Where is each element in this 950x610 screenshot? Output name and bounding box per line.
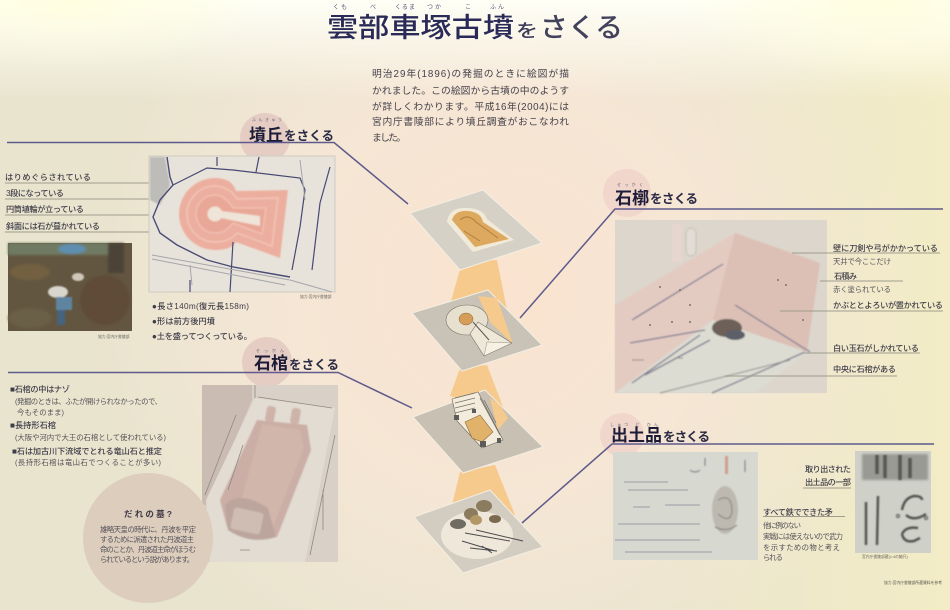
title: さくる — [540, 13, 623, 43]
facts: mound: ●土を盛ってつくっている。 — [152, 331, 252, 341]
title: つか — [427, 4, 441, 11]
facts: stone coffin: (長持形石棺は竜山石でつくることが多い) — [15, 458, 161, 467]
callout circle: whose tomb: 雄略天皇の時代に、丹波を平定 — [100, 525, 197, 534]
facts: stone coffin — [10, 384, 166, 467]
heading: stone chamber: せっかく — [617, 181, 643, 187]
drawing of excavated objects — [613, 452, 758, 560]
callout circle: whose tomb: するために派遣された丹波道主 — [100, 535, 194, 544]
text: iron spears — [763, 507, 845, 562]
footer credit: 協力:宮内庁書陵部所蔵資料を参考 — [884, 580, 942, 585]
heading: excavated objects: をさくる — [663, 430, 710, 444]
callout circle: whose tomb: だれの墓? — [124, 509, 172, 519]
heading: excavated objects — [600, 413, 710, 457]
callout labels: stone chamber: 白い玉石がしかれている — [833, 343, 919, 353]
layer: artefacts — [414, 490, 543, 573]
heading: mound: 墳丘 — [249, 125, 283, 145]
heading: stone coffin: をさくる — [289, 358, 339, 372]
facts: stone coffin: ■石は加古川下流域でとれる竜山石と推定 — [12, 446, 162, 456]
layer: sarcophagus chamber — [413, 390, 543, 473]
drawing of stone chamber — [615, 220, 827, 393]
heading: stone chamber — [603, 169, 698, 217]
title: こ — [465, 4, 471, 11]
layer: mound — [410, 190, 542, 270]
text: iron spears: 他に例のない — [763, 521, 801, 530]
beams — [448, 260, 515, 515]
photo credit: 協力:宮内庁書陵部 — [98, 334, 130, 339]
heading: mound: ふんきゅう — [252, 116, 282, 122]
callout labels: stone chamber — [725, 243, 943, 376]
callout labels: mound — [5, 173, 200, 232]
intro text block: ました。 — [372, 132, 406, 144]
text: iron spears: を示すための物と考え — [763, 543, 840, 552]
leader line to mound layer — [7, 142, 408, 204]
callout circle: whose tomb: られているという説があります。 — [100, 555, 194, 564]
leader line to chamber layer — [520, 209, 943, 318]
heading: stone chamber: をさくる — [650, 192, 698, 206]
leader line to coffin layer — [8, 372, 412, 408]
heading: mound: をさくる — [284, 129, 334, 143]
callout labels: stone chamber: 中央に石棺がある — [833, 364, 896, 374]
callout labels: mound: 3段になっている — [6, 188, 64, 198]
central stack of layers with orange beams — [410, 190, 543, 573]
caption: selected objects — [803, 464, 851, 488]
heading: excavated objects: 出土品 — [611, 426, 662, 445]
title: くも — [333, 4, 347, 11]
title: ふん — [490, 4, 504, 11]
facts: stone coffin: ■石棺の中はナゾ — [10, 384, 70, 394]
panel: mound (funkyu) — [5, 113, 408, 341]
title: 雲部車塚古墳 — [327, 13, 514, 43]
heading: mound — [240, 113, 334, 163]
caption: selected objects: 取り出された — [805, 464, 851, 474]
facts: stone coffin: ■長持形石棺 — [10, 420, 56, 430]
intro text block: 明治29年(1896)の発掘のときに絵図が描 — [372, 67, 569, 80]
text: iron spears: 実戦には使えないので武力 — [763, 532, 843, 541]
facts: stone coffin: (大阪や河内で大王の石棺として使われている) — [15, 433, 166, 442]
title — [327, 4, 623, 43]
map of keyhole tomb — [149, 156, 335, 292]
facts: mound: ●長さ140m(復元長158m) — [152, 301, 249, 311]
heading: stone coffin — [242, 337, 339, 387]
leader line to objects layer — [522, 444, 934, 523]
intro text block: 宮内庁書陵部により墳丘調査がおこなわれ — [372, 115, 569, 128]
callout labels: mound: 円筒埴輪が立っている — [6, 204, 84, 214]
panel: stone chamber (sekkaku) — [520, 169, 943, 393]
intro text block: が詳しくわかります。平成16年(2004)には — [372, 100, 569, 113]
drawing of stone coffin — [202, 385, 338, 562]
photo of excavation — [8, 243, 132, 331]
caption: selected objects: 出土品の一部 — [805, 477, 851, 487]
title: を — [516, 21, 538, 41]
heading: stone coffin: 石棺 — [254, 354, 288, 373]
callout circle: whose tomb: 命のことか、丹波道主命がほうむ — [100, 545, 196, 554]
callout labels: mound: 斜面には石が葺かれている — [6, 221, 100, 231]
facts: stone coffin: 今もそのまま) — [17, 408, 64, 417]
facts: stone coffin: (発掘のときは、ふたが開けられなかったので、 — [15, 397, 162, 406]
title: くるま — [395, 4, 415, 11]
facts: mound: ●形は前方後円墳 — [152, 316, 215, 326]
callout labels: stone chamber: かぶととよろいが置かれている — [833, 300, 943, 310]
callout labels: stone chamber: 天井で今ここだけ — [833, 257, 891, 266]
facts: mound — [152, 301, 252, 341]
panel: excavated objects (shutsudohin) — [522, 413, 934, 562]
callout labels: mound: はりめぐらされている — [5, 173, 91, 182]
map credit: 協力:宮内庁書陵部 — [300, 294, 332, 299]
title: べ — [370, 4, 376, 11]
intro text block — [372, 67, 569, 144]
photo credit: objects: 宮内庁書陵部蔵(1:4の縮尺) — [862, 554, 909, 559]
panel: stone coffin (sekkan) — [8, 337, 412, 603]
heading: stone chamber: 石槨 — [615, 189, 649, 208]
text: iron spears: すべて鉄でできた矛 — [763, 507, 833, 517]
heading: excavated objects: しゅつ ど ひん — [610, 421, 658, 427]
layer: chamber position — [412, 290, 542, 371]
heading: stone coffin: せっかん — [256, 347, 284, 353]
text: iron spears: られる — [763, 553, 783, 562]
callout labels: stone chamber: 赤く塗られている — [833, 285, 891, 294]
intro text block: かれました。この絵図から古墳の中のようす — [372, 84, 569, 97]
callout circle: whose tomb — [83, 473, 213, 603]
photo of iron objects — [855, 451, 931, 553]
callout labels: stone chamber: 壁に刀剣や弓がかかっている — [833, 243, 938, 253]
callout labels: stone chamber: 石積み — [834, 271, 857, 281]
